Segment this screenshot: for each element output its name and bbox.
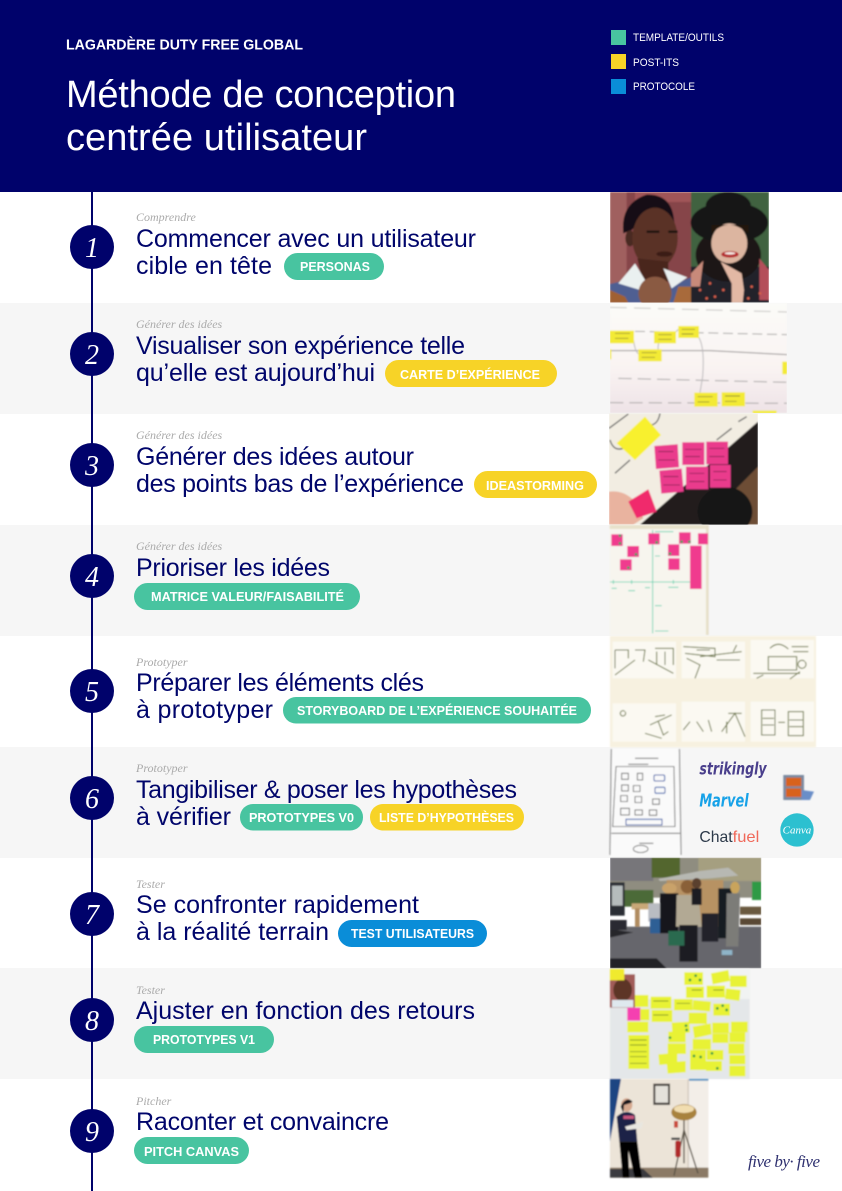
photo: ideastorming post-its — [609, 413, 758, 537]
logo: canva — [780, 813, 814, 847]
logo: five by five: five by· five — [748, 1152, 820, 1171]
number badge 5 — [70, 669, 114, 713]
number badge 7: 7 — [85, 900, 100, 931]
heading — [136, 332, 465, 387]
number badge 3 — [70, 443, 114, 487]
step 5 — [70, 655, 591, 724]
step 4 — [70, 539, 360, 610]
photo: storyboard sketches — [610, 636, 816, 747]
row backgrounds — [0, 303, 842, 1079]
step 6 — [70, 761, 524, 831]
heading: des points bas de l’expérience — [136, 470, 464, 498]
tag: test utilisateurs: TEST UTILISATEURS — [351, 926, 474, 941]
tag: matrice: MATRICE VALEUR/FAISABILITÉ — [151, 589, 344, 604]
tag: personas: PERSONAS — [300, 259, 370, 274]
tag: ideastorming — [474, 471, 597, 498]
tag: liste d'hypothèses: LISTE D’HYPOTHÈSES — [379, 810, 514, 825]
number badge 4: 4 — [85, 562, 99, 593]
step 1 — [70, 210, 476, 280]
legend: PROTOCOLE — [633, 81, 695, 93]
heading: Prioriser les idées — [136, 554, 330, 582]
number badge 4 — [70, 554, 114, 598]
step 7 — [70, 877, 487, 947]
number badge 9 — [70, 1109, 114, 1153]
heading: qu’elle est aujourd’hui — [136, 359, 375, 387]
heading: Tangibiliser & poser les hypothèses — [136, 776, 517, 804]
tag: pitch canvas: PITCH CANVAS — [144, 1144, 239, 1159]
category: Générer des idées — [136, 428, 223, 442]
heading: à vérifier — [136, 803, 231, 831]
step 9 — [70, 1094, 389, 1164]
tag: storyboard — [283, 697, 591, 724]
title — [66, 74, 456, 159]
number badge 3: 3 — [84, 451, 99, 482]
logo: chatfuel: Chat — [699, 829, 733, 846]
category: Tester — [136, 877, 165, 891]
category: Prototyper — [135, 761, 188, 775]
photo: pitch presentation — [610, 1079, 708, 1178]
number badge 2: 2 — [85, 340, 99, 371]
heading — [136, 776, 517, 831]
header band — [0, 0, 842, 192]
photo: personas portraits — [610, 192, 769, 310]
number badge 7 — [70, 892, 114, 936]
heading: Ajuster en fonction des retours — [136, 997, 475, 1025]
photo: feedback post-it wall — [610, 969, 750, 1079]
category: Tester — [136, 983, 165, 997]
icon: film reel — [783, 775, 814, 800]
heading: Raconter et convaincre — [136, 1108, 389, 1136]
tag: personas — [284, 253, 384, 280]
heading — [136, 669, 424, 724]
logo: canva: Canva — [783, 824, 812, 836]
logo: chatfuel: fuel — [733, 829, 759, 846]
heading: Visualiser son expérience telle — [136, 332, 465, 360]
tag: prototypes v0: PROTOTYPES V0 — [249, 810, 354, 825]
heading: Se confronter rapidement — [136, 891, 419, 919]
category: Générer des idées — [136, 539, 223, 553]
client name: LAGARDÈRE DUTY FREE GLOBAL — [66, 36, 303, 54]
tag: test utilisateurs — [338, 920, 487, 947]
number badge 8 — [70, 998, 114, 1042]
tag: prototypes v1 — [134, 1026, 274, 1053]
title: Méthode de conception — [66, 74, 456, 116]
tag: carte d'expérience: CARTE D’EXPÉRIENCE — [400, 367, 540, 382]
tag: prototypes v1: PROTOTYPES V1 — [153, 1032, 255, 1047]
step 3 — [70, 428, 597, 498]
photo: value-feasibility matrix — [610, 525, 709, 635]
heading: Préparer les éléments clés — [136, 669, 424, 697]
category: Pitcher — [135, 1094, 172, 1108]
tag: carte d'expérience — [385, 360, 557, 387]
heading: à prototyper — [136, 696, 273, 724]
heading: à la réalité terrain — [136, 918, 329, 946]
photo: experience map — [610, 303, 787, 413]
step 2 — [70, 317, 557, 387]
timeline line — [91, 192, 93, 1191]
category: Prototyper — [135, 655, 188, 669]
number badge 1: 1 — [85, 233, 99, 264]
tag: storyboard: STORYBOARD DE L’EXPÉRIENCE SOUHAITÉE — [297, 703, 577, 718]
tag: matrice — [134, 583, 360, 610]
logo: strikingly: strikingly — [699, 759, 768, 778]
heading: Commencer avec un utilisateur — [136, 225, 476, 253]
legend: POST-ITS — [633, 57, 679, 69]
number badge 6 — [70, 776, 114, 820]
photo: field user test — [610, 858, 761, 968]
phone sketch — [610, 749, 681, 857]
photo: prototype sketch and tool logos — [610, 749, 814, 857]
number badge 8: 8 — [85, 1006, 99, 1037]
logo: chatfuel — [699, 829, 759, 846]
number badge 5: 5 — [85, 677, 99, 708]
legend: TEMPLATE/OUTILS — [633, 32, 724, 44]
category: Générer des idées — [136, 317, 223, 331]
number badge 6: 6 — [85, 784, 99, 815]
heading: cible en tête — [136, 252, 272, 280]
number badge 2 — [70, 332, 114, 376]
heading — [136, 443, 464, 498]
heading: Générer des idées autour — [136, 443, 414, 471]
category: Comprendre — [136, 210, 196, 224]
number badge 1 — [70, 225, 114, 269]
step 8 — [70, 983, 475, 1053]
tag: prototypes v0 — [240, 804, 363, 830]
heading — [136, 891, 419, 946]
heading — [136, 225, 476, 280]
tag: liste d'hypothèses — [370, 804, 524, 830]
title: centrée utilisateur — [66, 117, 367, 159]
number badge 9: 9 — [85, 1117, 99, 1148]
logo: marvel: Marvel — [699, 791, 749, 812]
tag: ideastorming: IDEASTORMING — [486, 478, 584, 493]
legend — [611, 30, 724, 94]
tag: pitch canvas — [134, 1137, 249, 1164]
